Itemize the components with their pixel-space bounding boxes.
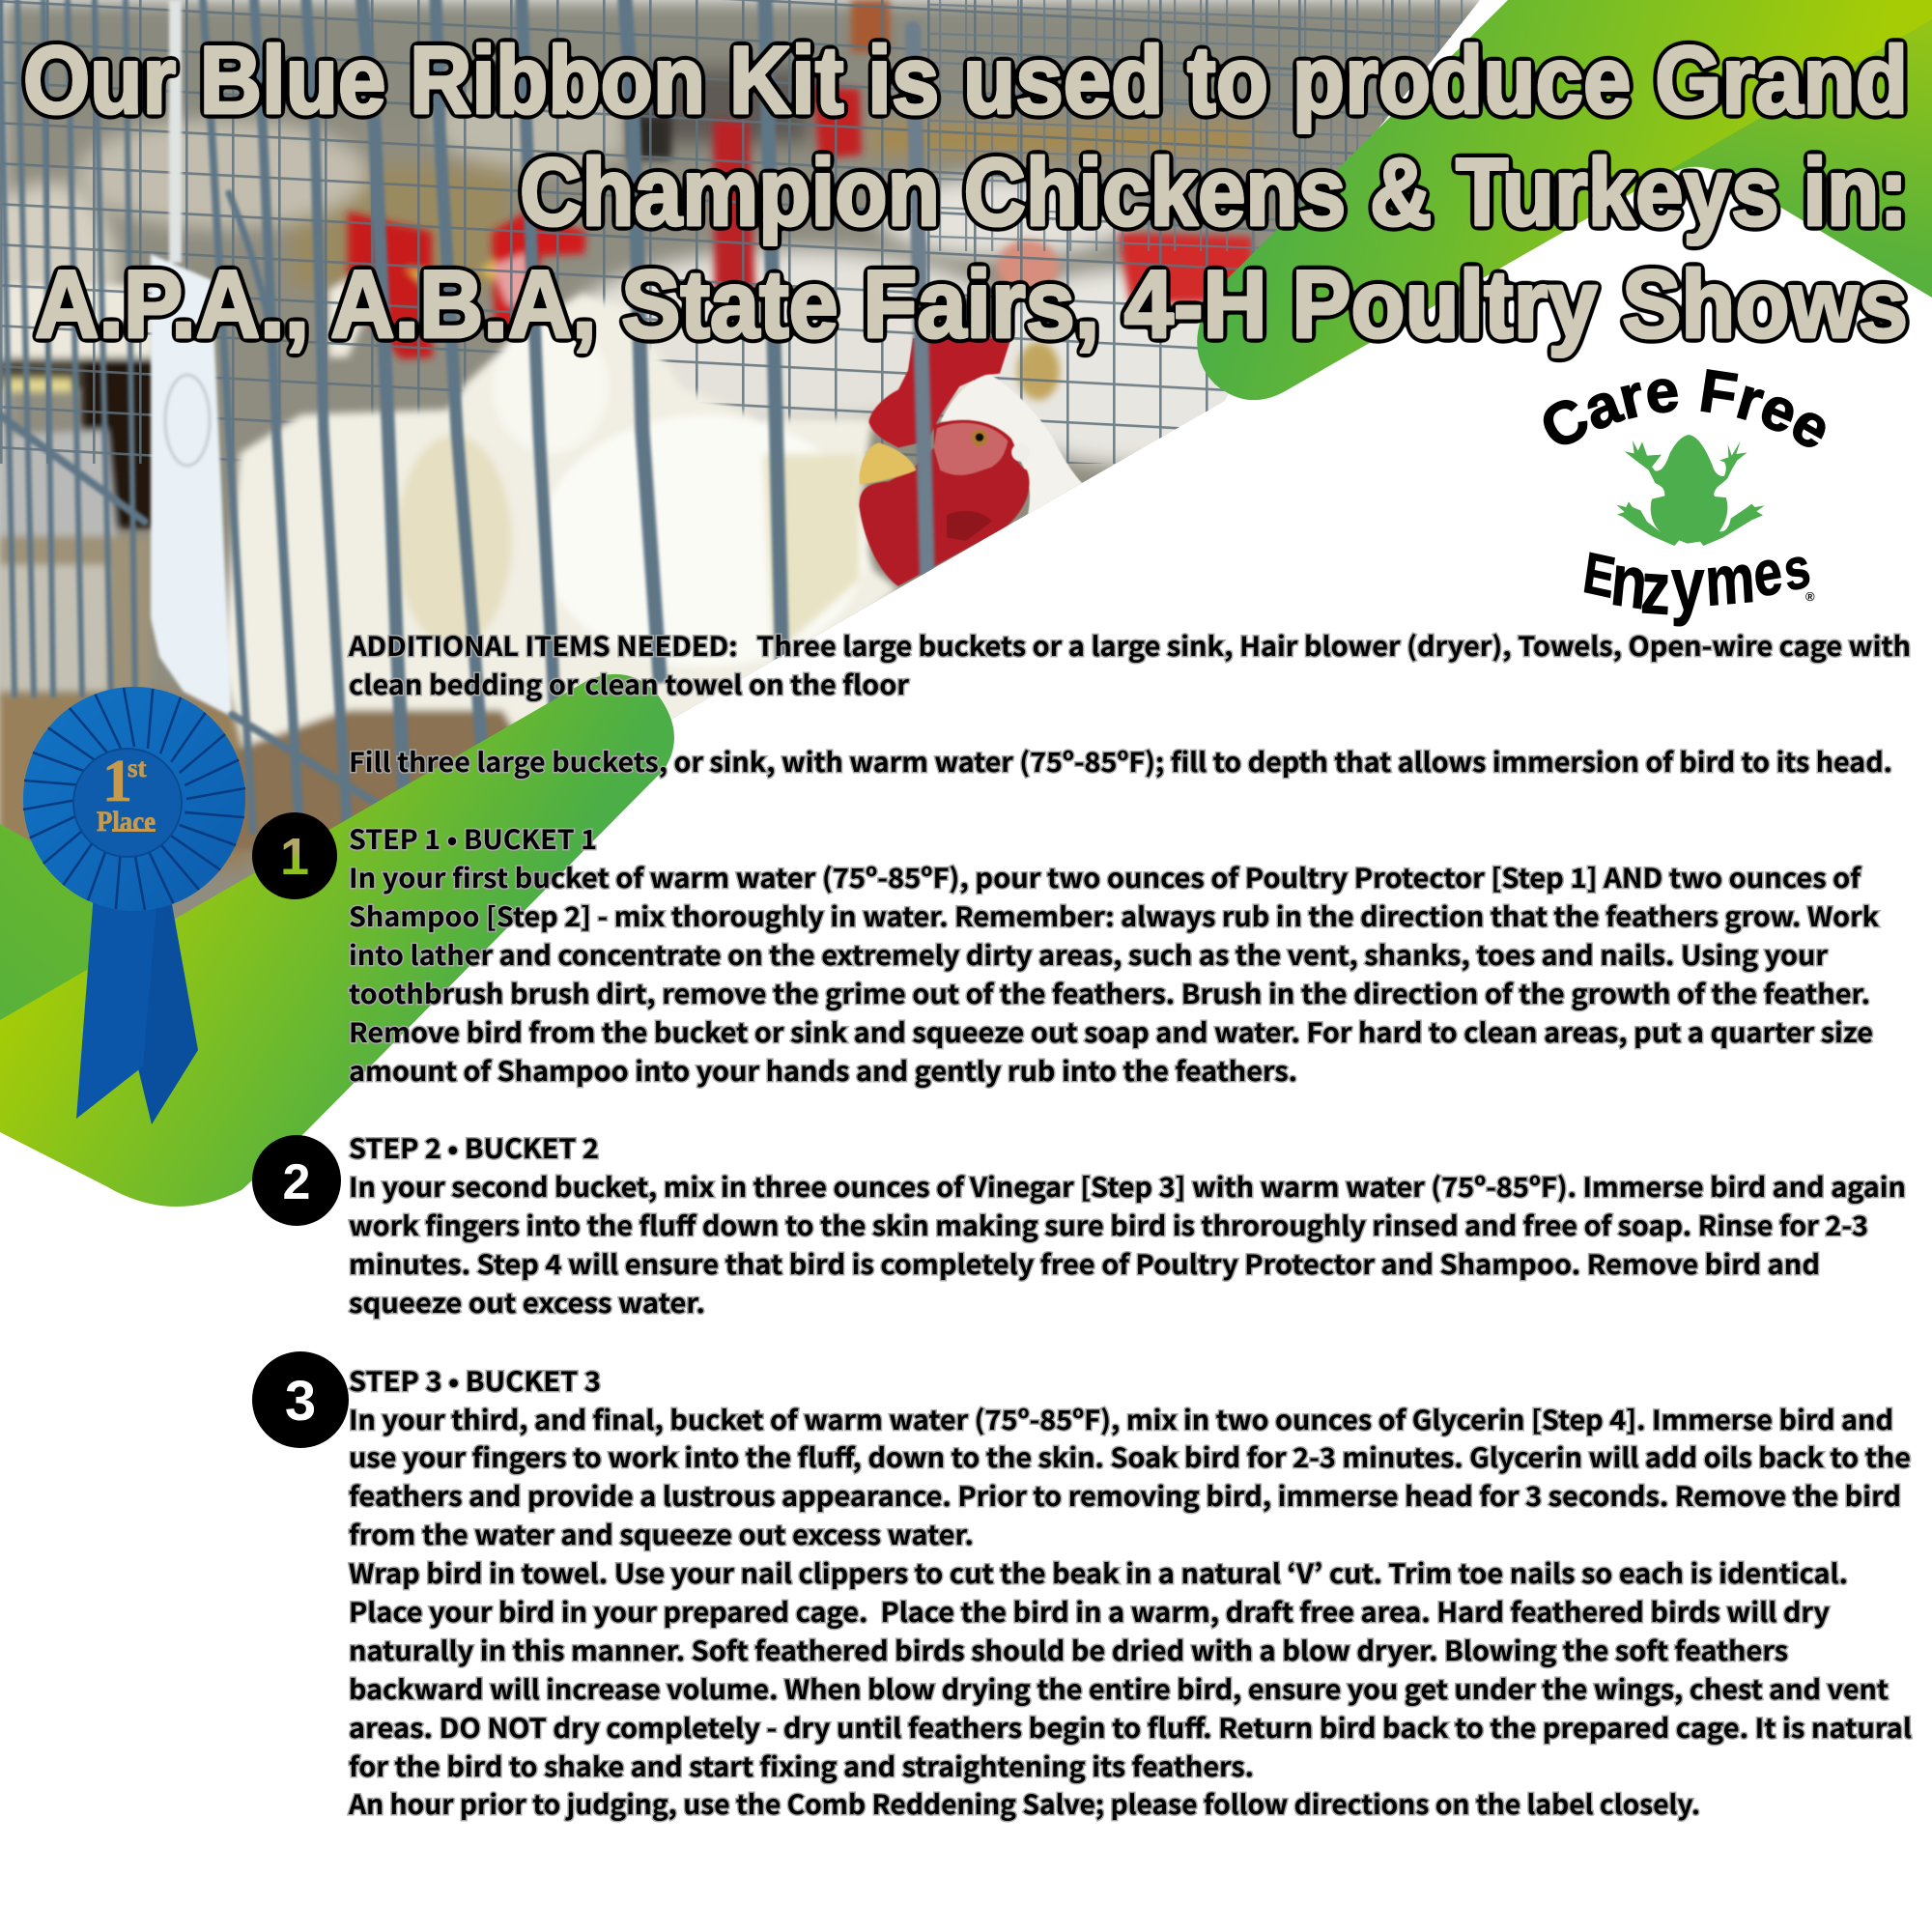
step number 1 badge: 1 (280, 828, 309, 886)
green swoosh: top right band (1197, 0, 1932, 400)
logo text: Enzymes: s (1779, 534, 1814, 604)
wattle and face (859, 420, 1030, 586)
text block: step 1: toothbrush brush dirt, remove the grime out of the feathers. Brush in the direction of the growth of the feather. (349, 973, 1870, 1011)
text block: step 1 (349, 818, 1879, 1089)
icon: green frog (1616, 435, 1765, 546)
text block: step 1: amount of Shampoo into your hands and gently rub into the feathers. (349, 1050, 1297, 1089)
rosette pleats (23, 687, 245, 911)
text block: step 3: areas. DO NOT dry completely - dry until feathers begin to fluff. Return bird back to the prepared cage. It is natural (349, 1707, 1912, 1746)
white chicken body (0, 294, 898, 850)
text block: step 3 (348, 1360, 1912, 1822)
rosette center button: 1 (102, 749, 132, 814)
foreground cage wires (0, 0, 927, 831)
text block: step 3: Wrap bird in towel. Use your nail clippers to cut the beak in a natural ‘V’ cut. Trim toe nails so each is identical. (349, 1552, 1848, 1591)
beak (859, 442, 916, 485)
text block: fill buckets: Fill three large buckets, or sink, with warm water (75º-85ºF); fill to depth that allows immersion of bird to its head. (349, 741, 1892, 780)
text block: step 3: use your fingers to work into the fluff, down to the skin. Soak bird for 2-3 minutes. Glycerin will add oils back to the (349, 1436, 1911, 1475)
text block: step 3: In your third, and final, bucket of warm water (75º-85ºF), mix in two ounces of Glycerin [Step 4]. Immerse bird and (349, 1399, 1893, 1437)
white judging tag (151, 0, 232, 717)
eye (971, 430, 988, 446)
text block: step 3: Place your bird in your prepared cage. Place the bird in a warm, draft free area. Hard feathered birds will dry (349, 1591, 1830, 1630)
text block: step 3: for the bird to shake and start fixing and straightening its feathers. (349, 1746, 1254, 1784)
logo text: Care Free: Care Free (1544, 369, 1826, 447)
logo text: Enzymes: n (1607, 538, 1651, 625)
text block: additional items needed (348, 625, 1911, 702)
step number 3 badge (252, 1351, 349, 1448)
text block: step 1: STEP 1 • BUCKET 1 (349, 818, 597, 857)
title (23, 26, 1908, 357)
text block: step 2: STEP 2 • BUCKET 2 (349, 1127, 599, 1166)
logo: Care Free Enzymes (1544, 369, 1826, 631)
photo: show chickens in wire cages (0, 0, 1488, 966)
green swoosh: lower left band (0, 674, 674, 1207)
registered mark: ® (1805, 589, 1815, 604)
cage wire mesh (0, 0, 1488, 464)
logo text: Enzymes: z (1639, 547, 1672, 631)
text block: step 3: naturally in this manner. Soft feathered birds should be dried with a blow dryer. Blowing the soft feathers (349, 1630, 1788, 1668)
text block: step 2: work fingers into the fluff down to the skin making sure bird is throroughly rinsed and free of soap. Rinse for 2-3 (349, 1205, 1868, 1243)
logo text: Enzymes: E (1579, 540, 1619, 611)
text block: step 1: In your first bucket of warm water (75º-85ºF), pour two ounces of Poultry Protector [Step 1] AND two ounces of (349, 857, 1862, 895)
step number 1 badge (252, 812, 337, 899)
rosette center button: st (128, 753, 147, 782)
text block: step 1: Remove bird from the bucket or sink and squeeze out soap and water. For hard to clean areas, put a quarter size (349, 1011, 1873, 1050)
step number 2 badge (252, 1135, 341, 1226)
text block: step 2: minutes. Step 4 will ensure that bird is completely free of Poultry Protector and Shampoo. Remove bird and (349, 1243, 1820, 1282)
text block: step 3: from the water and squeeze out excess water. (349, 1514, 974, 1552)
neck feathers (940, 374, 1085, 519)
rosette center button: Place (97, 806, 156, 838)
text block: step 1: Shampoo [Step 2] - mix thoroughly in water. Remember: always rub in the direction that the feathers grow. Work (349, 895, 1879, 934)
text block: step 2: In your second bucket, mix in three ounces of Vinegar [Step 3] with warm water (75º-85ºF). Immerse bird and again (349, 1166, 1906, 1205)
rosette center button (73, 749, 182, 857)
comb (868, 338, 1011, 447)
blue ribbon rosette award (23, 687, 245, 1124)
logo text: Enzymes: y (1671, 542, 1705, 627)
green swoosh: left dark band (0, 824, 169, 1024)
text block: additional items needed: clean bedding or clean towel on the floor (349, 664, 910, 702)
text block: step 1: into lather and concentrate on the extremely dirty areas, such as the vent, shanks, toes and nails. Using your (349, 934, 1829, 973)
text block: step 3: An hour prior to judging, use the Comb Reddening Salve; please follow directions on the label closely. (348, 1783, 1700, 1822)
logo text: Enzymes: e (1749, 535, 1785, 611)
text block: additional items needed: ADDITIONAL ITEMS NEEDED: Three large buckets or a large sink, Hair blower (dryer), Towels, Open-wire cage with (348, 625, 1911, 664)
text block: step 3: STEP 3 • BUCKET 3 (349, 1360, 601, 1399)
text block: step 3: backward will increase volume. When blow drying the entire bird, ensure you get under the wings, chest and vent (349, 1668, 1889, 1707)
step number 2 badge: 2 (283, 1154, 310, 1210)
rooster head (859, 338, 1085, 586)
text block: step 2 (349, 1127, 1906, 1321)
text block: step 3: feathers and provide a lustrous appearance. Prior to removing bird, immerse head for 3 seconds. Remove the bird (349, 1475, 1901, 1514)
green swoosh: far right band (1660, 19, 1932, 298)
step number 3 badge: 3 (285, 1370, 316, 1433)
logo text: Enzymes: m (1703, 539, 1757, 620)
text block: step 2: squeeze out excess water. (349, 1282, 705, 1321)
ribbon tails (76, 894, 198, 1124)
